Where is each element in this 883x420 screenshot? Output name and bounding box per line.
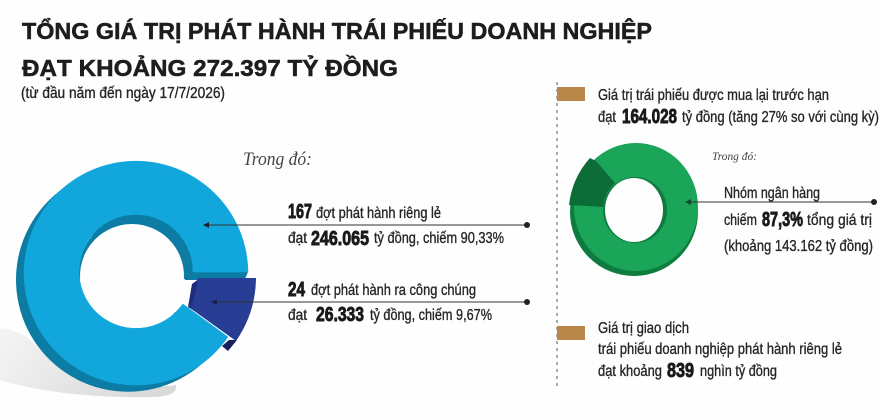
chart: green donut of bank share [569,143,698,276]
text block: early redemption value [557,87,879,128]
segment: private placements [24,161,248,385]
callout: private placements: đạt [288,230,308,247]
text block: transaction value [557,320,842,382]
text block: early redemption value: đạt [598,109,617,126]
callout: public offerings: tỷ đồng, chiếm 9,67% [370,307,492,324]
script label: of which (small): Trong đó: [712,149,757,163]
title: TỔNG GIÁ TRỊ PHÁT HÀNH TRÁI PHIẾU DOANH NGHIỆP [22,17,652,44]
title [22,17,652,81]
callout: bank group: 87,3% [762,209,803,231]
text block: transaction value: 839 [667,360,694,382]
segment: public offerings [188,278,256,351]
text block: early redemption value: Giá trị trái phiếu được mua lại trước hạn [598,87,829,104]
segment: other issuers [569,158,615,207]
callout: public offerings: 24 [288,279,306,301]
text block: transaction value: Giá trị giao dịch [598,320,689,337]
callout: private placements: 246.065 [311,228,369,250]
callout: public offerings: đạt [288,307,308,324]
text block: transaction value: đạt khoảng [598,363,662,380]
callout: public offerings [211,279,530,326]
callout: bank group: tổng giá trị [807,212,872,229]
callout: bank group: chiếm [724,212,757,229]
callout: public offerings: đợt phát hành ra công chúng [311,282,476,299]
chart: blue donut of bond issuance [0,161,256,397]
callout: bank group: Nhóm ngân hàng [724,185,820,202]
callout: private placements: đợt phát hành riêng lẻ [316,205,441,222]
callout: public offerings: 26.333 [316,304,364,326]
text block: early redemption value: 164.028 [622,106,677,128]
text block: transaction value: nghìn tỷ đồng [700,363,777,380]
text block: transaction value: trái phiếu doanh nghiệp phát hành riêng lẻ [598,341,842,358]
callout: bank group [685,185,877,255]
script label: of which: Trong đó: [243,149,312,170]
callout: private placements: 167 [288,201,312,223]
subtitle: period: (từ đầu năm đến ngày 17/7/2026) [21,85,225,102]
callout: private placements: tỷ đồng, chiếm 90,33% [374,230,504,247]
dashed divider [556,82,558,390]
title: ĐẠT KHOẢNG 272.397 TỶ ĐỒNG [22,53,398,81]
callout: private placements [203,201,530,250]
